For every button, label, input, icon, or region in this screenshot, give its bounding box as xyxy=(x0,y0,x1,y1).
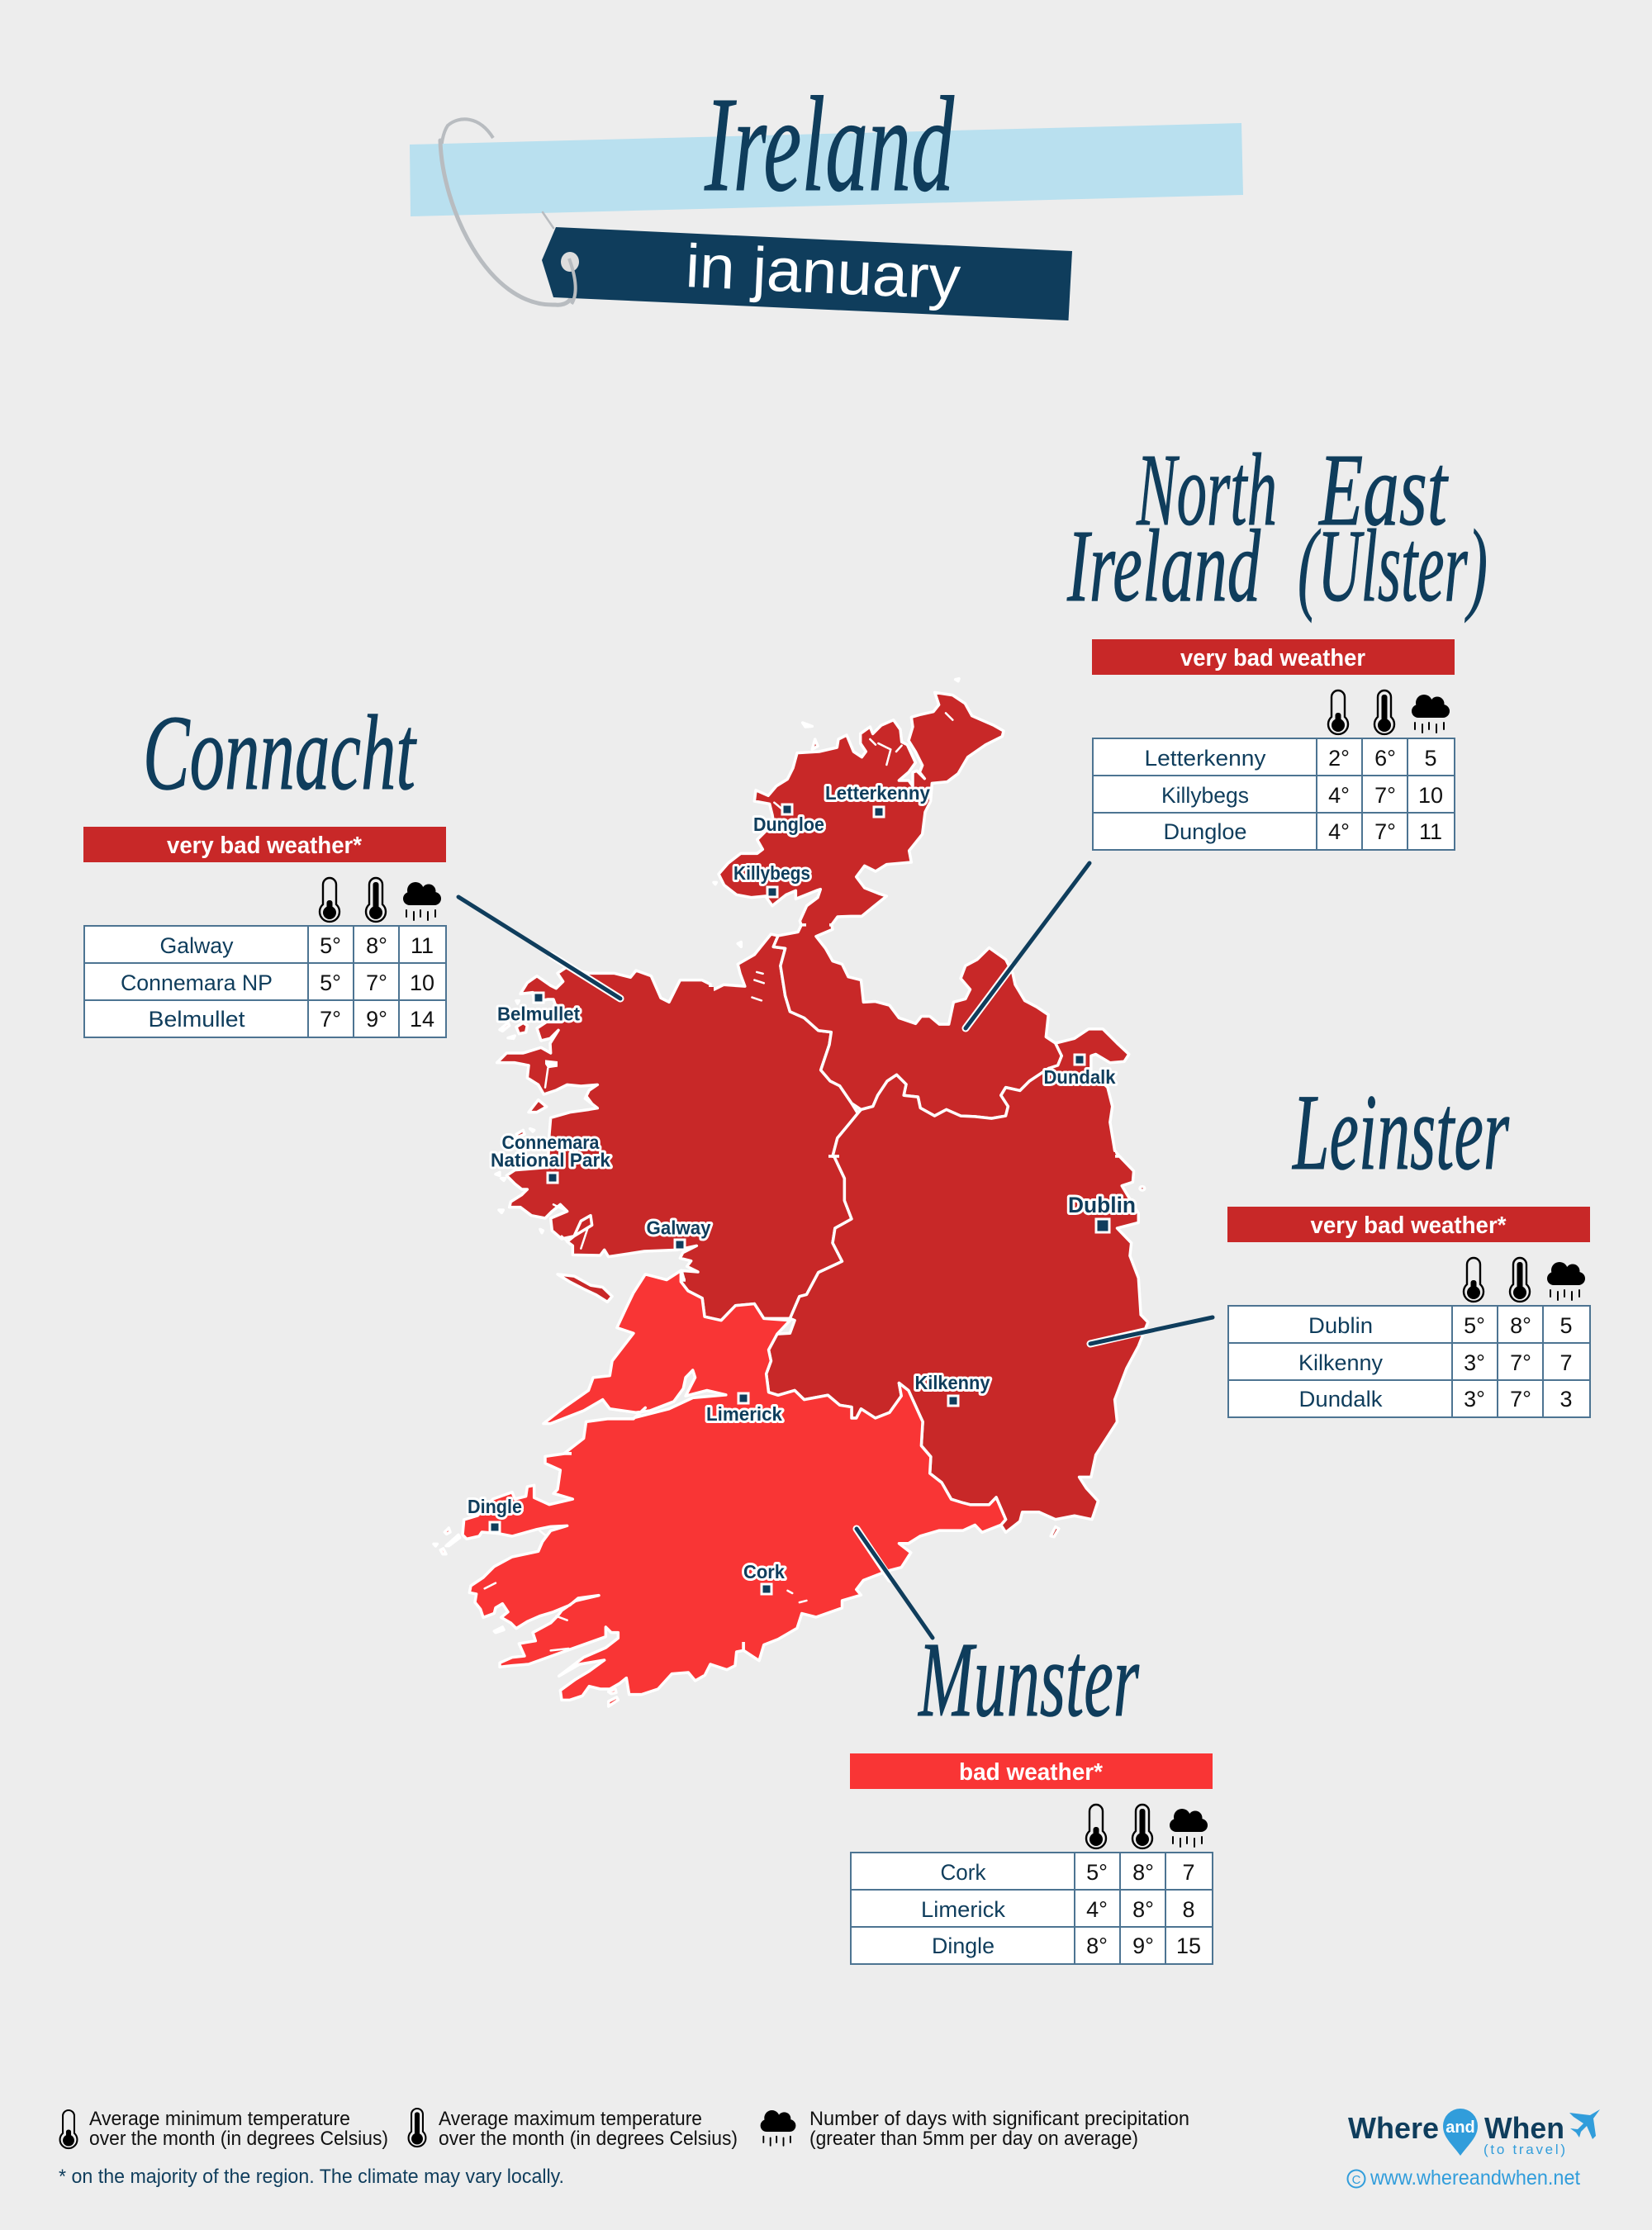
legend: maximum temperature: Average maximum temperature xyxy=(439,2108,702,2130)
climate table: 3 xyxy=(1559,1387,1573,1412)
climate table: Dingle xyxy=(932,1933,995,1958)
city: Connemara National Park xyxy=(491,1132,610,1183)
city: Galway xyxy=(646,1217,711,1250)
city: Dungloe: Dungloe xyxy=(753,814,824,835)
city: Dingle: Dingle xyxy=(468,1496,522,1517)
legend xyxy=(59,2108,1189,2188)
climate table: 8° xyxy=(1132,1860,1154,1885)
climate table: 7 xyxy=(1559,1350,1573,1375)
climate table: 8° xyxy=(366,933,387,958)
city: Killybegs xyxy=(733,862,810,897)
city: Dungloe xyxy=(753,804,824,835)
climate table: 7° xyxy=(320,1007,341,1032)
region: North East Ireland (Ulster) xyxy=(714,679,1061,1118)
city: Dublin: Dublin xyxy=(1068,1193,1136,1217)
climate table: Connemara NP xyxy=(121,970,273,995)
title block xyxy=(410,69,1243,320)
panel: North East Ireland (Ulster) xyxy=(1066,434,1488,850)
logo: Where and When: and xyxy=(1446,2118,1475,2137)
panel: Munster xyxy=(850,1620,1213,1964)
climate table: Galway xyxy=(160,933,234,958)
climate table: 3° xyxy=(1464,1350,1485,1375)
icons xyxy=(1086,1805,1208,1848)
climate table: 11 xyxy=(411,933,434,958)
climate table xyxy=(1228,1306,1590,1417)
leader line: North East Ireland xyxy=(966,863,1089,1028)
leader line: Leinster xyxy=(1090,1317,1213,1344)
climate table: 7° xyxy=(366,970,387,995)
legend: precipitation: (greater than 5mm per day on average) xyxy=(809,2128,1138,2150)
weather bar: very bad weather* xyxy=(167,833,363,859)
climate table: 5 xyxy=(1559,1313,1573,1338)
logo: Where and When: (to travel) xyxy=(1483,2142,1565,2157)
weather bar xyxy=(850,1753,1213,1789)
climate table: 10 xyxy=(410,970,434,995)
climate table xyxy=(851,1853,1213,1964)
tag string behind band xyxy=(441,119,493,206)
main title: Ireland xyxy=(704,69,954,220)
dark tag xyxy=(542,227,1072,320)
city: Galway: Galway xyxy=(646,1217,711,1239)
footnote: * on the majority of the region. The climate may vary locally. xyxy=(59,2166,564,2188)
light blue title band xyxy=(410,123,1243,216)
icon: map pin xyxy=(1443,2109,1478,2156)
climate table: 15 xyxy=(1176,1933,1201,1958)
region title: (Ulster) xyxy=(1298,510,1488,624)
weather bar: bad weather* xyxy=(959,1759,1104,1786)
climate table: Limerick xyxy=(921,1897,1006,1922)
subtitle: in january xyxy=(684,231,962,312)
climate table: Cork xyxy=(940,1860,986,1885)
city: Connemara National Park: National Park xyxy=(491,1150,610,1171)
city: Limerick: Limerick xyxy=(706,1403,782,1425)
region: Leinster xyxy=(767,1029,1148,1537)
climate table: Dundalk xyxy=(1298,1387,1383,1412)
climate table: Dungloe xyxy=(1163,819,1247,844)
climate table: 5° xyxy=(320,933,341,958)
climate table: 5° xyxy=(320,970,341,995)
climate table: 2° xyxy=(1328,746,1350,771)
legend: maximum temperature: over the month (in degrees Celsius) xyxy=(439,2128,738,2150)
climate table: Letterkenny xyxy=(1145,746,1266,771)
legend: minimum temperature: Average minimum temperature xyxy=(89,2108,350,2130)
tag hole xyxy=(561,252,579,272)
city: Kilkenny: Kilkenny xyxy=(915,1372,990,1393)
city: Dublin xyxy=(1068,1193,1136,1232)
city: Limerick xyxy=(706,1393,782,1425)
city: Letterkenny: Letterkenny xyxy=(825,782,930,804)
climate table: 9° xyxy=(366,1007,387,1032)
region title: Leinster xyxy=(1292,1071,1509,1193)
region: Connacht xyxy=(496,934,857,1321)
region title: Munster xyxy=(918,1620,1139,1739)
region title xyxy=(1066,434,1488,624)
icons xyxy=(1328,690,1450,734)
leader line: Munster xyxy=(857,1529,933,1638)
city: Dundalk: Dundalk xyxy=(1044,1066,1116,1088)
climate table: Killybegs xyxy=(1161,783,1249,808)
climate table: 7° xyxy=(1374,783,1396,808)
region: Munster xyxy=(434,1270,1006,1706)
panel: Leinster xyxy=(1227,1071,1590,1417)
climate table: 14 xyxy=(410,1007,434,1032)
legend: maximum temperature xyxy=(409,2108,738,2150)
weather bar xyxy=(1227,1207,1590,1242)
leader line: Connacht xyxy=(458,897,620,999)
city: Connemara National Park: Connemara xyxy=(502,1132,600,1153)
tag string front xyxy=(440,140,574,305)
climate table: Dublin xyxy=(1308,1313,1373,1338)
climate table: 8° xyxy=(1132,1897,1154,1922)
logo: Where and When xyxy=(1348,2109,1600,2190)
panel: Connacht xyxy=(83,694,446,1037)
climate table xyxy=(1093,738,1455,850)
city: Dundalk xyxy=(1044,1055,1116,1088)
city: Kilkenny xyxy=(915,1372,990,1406)
climate table: 7° xyxy=(1374,819,1396,844)
climate table: 3° xyxy=(1464,1387,1485,1412)
climate table: 7° xyxy=(1510,1387,1531,1412)
city: Belmullet: Belmullet xyxy=(497,1003,580,1024)
weather bar xyxy=(1092,639,1455,675)
icon: copyright xyxy=(1348,2171,1365,2187)
region title: East xyxy=(1318,434,1449,548)
weather bar: very bad weather* xyxy=(1310,1212,1507,1239)
climate table: 5° xyxy=(1464,1313,1485,1338)
climate table: 7° xyxy=(1510,1350,1531,1375)
climate table: 9° xyxy=(1132,1933,1154,1958)
climate table xyxy=(84,926,446,1037)
climate table: 11 xyxy=(1419,819,1442,844)
city: Belmullet xyxy=(497,993,580,1024)
climate table: 4° xyxy=(1328,783,1350,808)
climate table: Kilkenny xyxy=(1298,1350,1383,1375)
logo: Where and When: Where xyxy=(1348,2111,1439,2145)
weather bar xyxy=(83,827,446,862)
climate table: 8° xyxy=(1086,1933,1108,1958)
climate table: 4° xyxy=(1328,819,1350,844)
icons xyxy=(1464,1258,1585,1302)
icon: plane xyxy=(1569,2109,1600,2139)
string over the tag xyxy=(569,259,576,304)
logo: Where and When: C xyxy=(1352,2173,1361,2187)
city: Cork xyxy=(743,1561,785,1594)
climate table: 4° xyxy=(1086,1897,1108,1922)
logo: Where and When: When xyxy=(1484,2111,1564,2145)
climate table: 10 xyxy=(1418,783,1443,808)
climate table: 8 xyxy=(1182,1897,1195,1922)
region title: Ireland xyxy=(1066,510,1260,624)
city: Letterkenny xyxy=(825,782,930,817)
weather bar: very bad weather xyxy=(1180,645,1365,671)
climate table: 5 xyxy=(1424,746,1437,771)
legend: precipitation: Number of days with significant precipitation xyxy=(809,2108,1189,2130)
map of Ireland xyxy=(434,679,1148,1706)
climate table: 8° xyxy=(1510,1313,1531,1338)
legend: minimum temperature xyxy=(60,2108,388,2150)
icons xyxy=(320,878,441,922)
city: Cork: Cork xyxy=(743,1561,785,1582)
logo: Where and When: www.whereandwhen.net xyxy=(1370,2166,1580,2190)
region title: Connacht xyxy=(143,694,417,813)
climate table: Belmullet xyxy=(149,1007,245,1032)
climate table: 7 xyxy=(1182,1860,1195,1885)
legend: minimum temperature: over the month (in degrees Celsius) xyxy=(89,2128,388,2150)
climate table: 5° xyxy=(1086,1860,1108,1885)
climate table: 6° xyxy=(1374,746,1396,771)
city: Dingle xyxy=(468,1496,522,1532)
city: Killybegs: Killybegs xyxy=(733,862,810,884)
legend: precipitation xyxy=(761,2108,1189,2150)
region title: North xyxy=(1136,434,1277,548)
